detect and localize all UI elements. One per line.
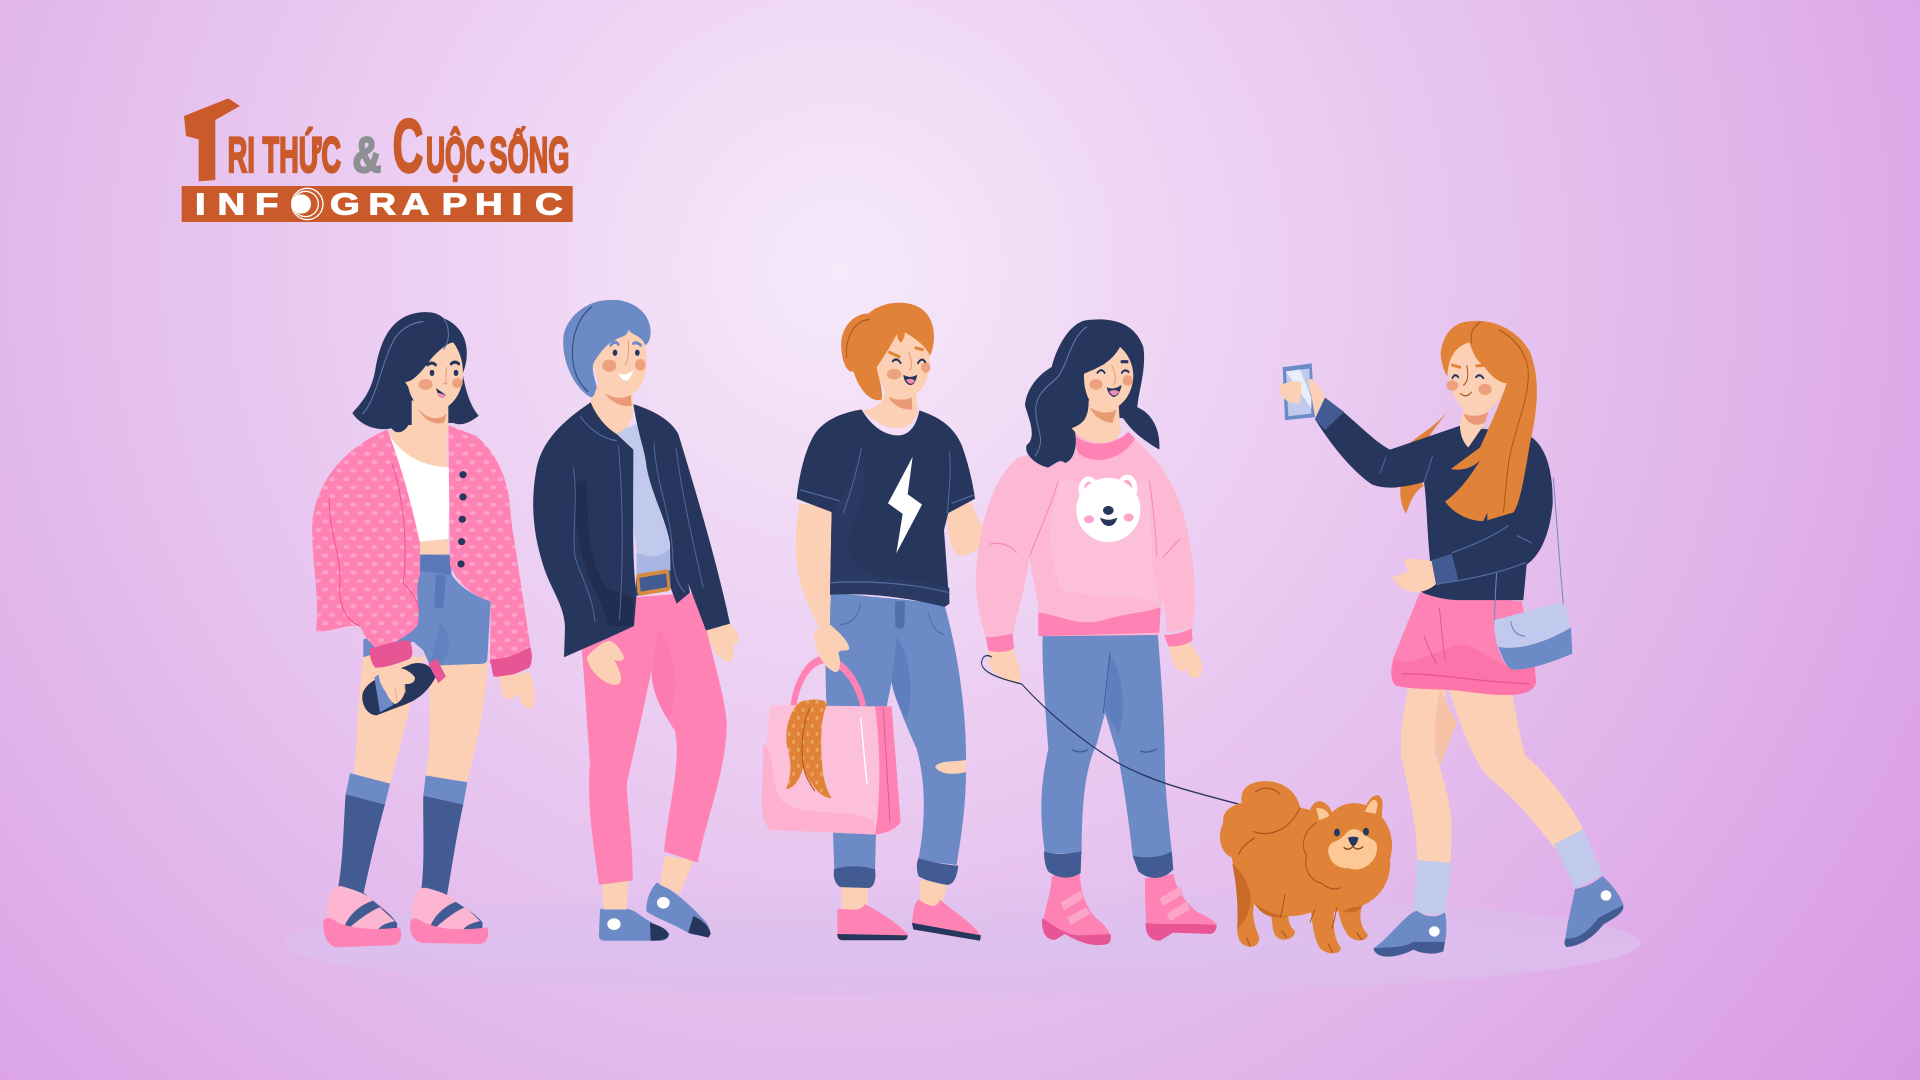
logo: Tri Thức & Cuộc Sống Infographic: [182, 98, 573, 222]
person 5 pink skirt: [1391, 593, 1536, 695]
person 3 hand over bag handle: [814, 624, 849, 672]
dog legs: [1236, 881, 1368, 953]
ground shadow ellipse: [284, 889, 1640, 997]
person 4 pink sweater: [976, 432, 1195, 652]
person 3 head and hair: [841, 303, 934, 428]
logo infographic banner: [182, 186, 573, 222]
person 4: dark wavy-haired girl in pink bear sweater holding leash: [976, 319, 1240, 945]
person 3 tote bag: [762, 659, 901, 834]
logo letter T mark: [184, 98, 240, 181]
dog leash: [982, 656, 1240, 805]
person 5 back hair: [1400, 408, 1450, 514]
person 5 navy top and arm: [1315, 398, 1553, 600]
person 5: long-haired girl in navy top and pink skirt taking a photo: [1279, 321, 1623, 957]
person 3 arms: [796, 499, 987, 626]
person 2 hands: [587, 624, 739, 685]
person 1 pink cardigan: [312, 425, 532, 677]
person 4 bear face print: [1076, 475, 1140, 542]
person 5 legs: [1401, 686, 1585, 864]
person 5 shoulder bag: [1494, 478, 1572, 670]
logo wordmark: &: [353, 127, 381, 183]
person 2 top and belt: [617, 423, 671, 596]
person 1 bottle and hand: [362, 659, 446, 715]
logo wordmark: C: [393, 104, 423, 188]
dog fur lines: [1238, 788, 1362, 953]
logo wordmark: SỐNG: [489, 126, 569, 183]
person 5 lower hand: [1392, 559, 1436, 592]
person 4 head and hair: [1025, 319, 1159, 468]
dog tail and body: [1220, 781, 1387, 929]
person 2 ankles: [602, 856, 693, 909]
person 1 right hand: [499, 672, 535, 709]
person 3 jeans: [825, 593, 966, 888]
person 4 jeans: [1041, 628, 1173, 878]
person 5 head and hair: [1441, 321, 1537, 521]
logo wordmark: [228, 104, 569, 188]
person 1 head and hair: [352, 312, 479, 434]
person 1 shorts: [363, 553, 491, 666]
person 2 pink trousers: [582, 593, 727, 885]
person 5 phone and hand: [1279, 363, 1325, 420]
person 1: girl in pink cardigan with bottle: [312, 312, 535, 947]
person 5 socks: [1413, 829, 1603, 916]
person 3 legs skin: [842, 880, 948, 914]
person 1 legs: [354, 655, 487, 784]
person 3 navy tee: [797, 409, 975, 607]
person 3 shoes: [837, 900, 981, 941]
person 5 sneakers: [1373, 876, 1623, 957]
person 3: orange-haired person in navy lightning tee with tote bag: [762, 303, 987, 941]
person 2 head and hair: [563, 300, 651, 434]
person 2: blue-haired person in navy jacket and pink trousers: [533, 300, 739, 941]
person 1 socks: [338, 773, 467, 897]
person 1 white top: [387, 432, 450, 542]
dog face and ears: [1310, 795, 1392, 907]
logo wordmark: RI THỨC: [228, 127, 341, 183]
dog: orange pomeranian: [1220, 781, 1392, 953]
logo infographic banner: GRAPHIC: [330, 188, 563, 221]
logo wordmark: UỘC: [426, 126, 485, 183]
person 4 boots: [1042, 874, 1217, 945]
person 4 hands: [988, 641, 1202, 684]
person 1 sandals: [323, 886, 488, 947]
logo infographic banner: INF: [195, 188, 278, 221]
person 2 navy jacket: [533, 401, 730, 657]
person 2 shoes: [599, 883, 711, 941]
person 1 torso: [390, 405, 448, 555]
